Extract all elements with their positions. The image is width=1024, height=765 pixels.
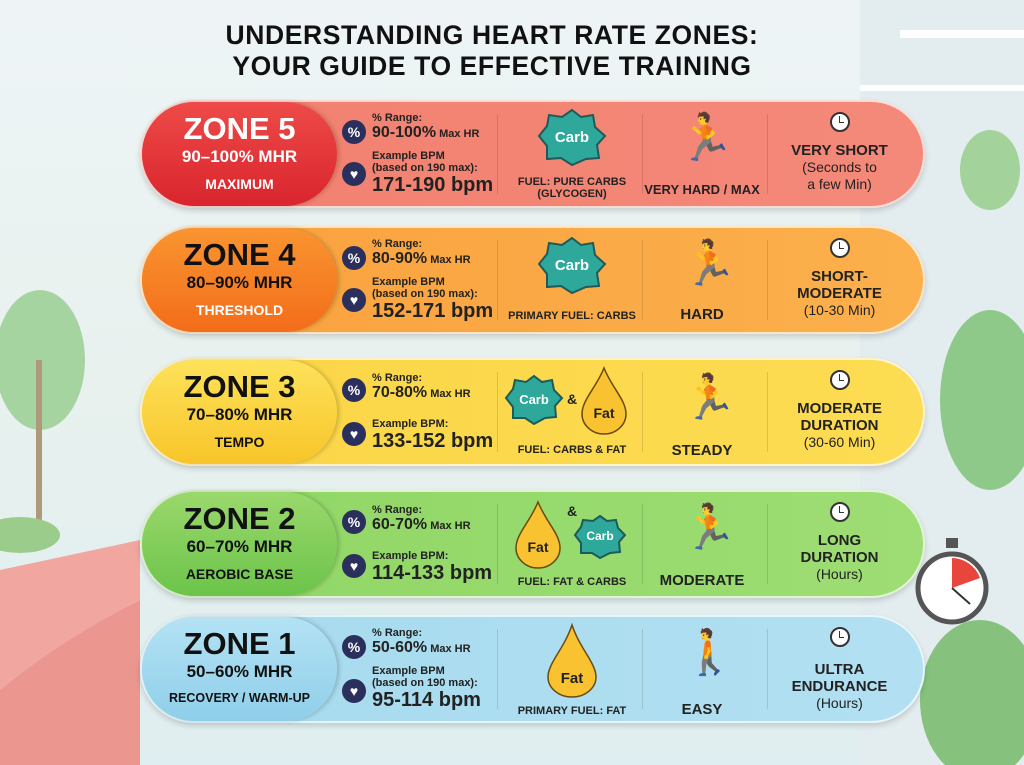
- panel: zone 4: MODERATE: [797, 285, 882, 302]
- panel: zone 1: Fat: [561, 670, 583, 687]
- panel: zone 3: %: [348, 382, 360, 398]
- panel: zone 1: ULTRA: [815, 661, 864, 678]
- panel: zone 1: %: [348, 639, 360, 655]
- zone 3 label pill: 70–80% MHR: [187, 405, 292, 424]
- panel: zone 5: (based on 190 max):: [372, 162, 478, 174]
- zone 2 stats: [342, 504, 492, 584]
- panel: zone 2: FUEL: FAT & CARBS: [518, 576, 626, 588]
- panel: zone 2: [140, 490, 925, 598]
- panel: zone 2: &: [567, 503, 577, 519]
- panel: zone 1: Example BPM: [372, 665, 445, 677]
- effort: steady: [672, 372, 737, 459]
- panel: zone 4: HARD: [680, 306, 724, 323]
- panel: zone 5: Carb: [555, 129, 589, 146]
- panel: zone 1: (Hours): [816, 695, 863, 711]
- panel: zone 2: Example BPM:: [372, 550, 448, 562]
- zone 4 label pill: [142, 228, 337, 332]
- panel: zone 1: PRIMARY FUEL: FAT: [518, 705, 626, 717]
- panel: zone 5: % Range:: [372, 112, 422, 124]
- panel: zone 4: 🏃: [682, 239, 737, 288]
- panel: zone 3: 🏃: [682, 373, 737, 422]
- panel: zone 5: (Seconds to: [802, 159, 877, 175]
- icon: stopwatch: [916, 538, 988, 624]
- panel: zone 2: 🏃: [682, 503, 737, 552]
- effort: hard: [680, 238, 737, 323]
- zone 1 label pill: 50–60% MHR: [187, 662, 292, 681]
- zone 5 label pill: [142, 102, 337, 206]
- panel: zone 1: [140, 615, 925, 723]
- title: UNDERSTANDING HEART RATE ZONES:: [226, 20, 758, 50]
- panel: zone 5: %: [348, 124, 360, 140]
- zone 5 label pill: ZONE 5: [184, 111, 295, 146]
- panel: zone 1: EASY: [682, 701, 722, 718]
- effort: moderate: [660, 502, 744, 589]
- zone 3 label pill: [142, 360, 337, 464]
- duration: [797, 238, 882, 318]
- zone 5 label pill: 90–100% MHR: [182, 147, 297, 166]
- title: [226, 20, 758, 81]
- panel: zone 3: DURATION: [800, 417, 879, 434]
- panel: zone 5: VERY SHORT: [791, 142, 888, 159]
- panel: zone 3: % Range:: [372, 372, 422, 384]
- zone 2 label pill: ZONE 2: [184, 501, 295, 536]
- panel: zone 3: Example BPM:: [372, 418, 448, 430]
- panel: zone 4: % Range:: [372, 238, 422, 250]
- zone 4 stats: [342, 238, 493, 322]
- zone 4 label pill: 80–90% MHR: [187, 273, 292, 292]
- panel: zone 3: Carb: [519, 392, 549, 407]
- panel: zone 4: (based on 190 max):: [372, 288, 478, 300]
- panel: zone 2: 114-133 bpm: [372, 562, 492, 584]
- title: YOUR GUIDE TO EFFECTIVE TRAINING: [232, 51, 752, 81]
- panel: zone 3: MODERATE: [797, 400, 882, 417]
- panel: zone 2: (Hours): [816, 566, 863, 582]
- duration: [792, 627, 887, 711]
- zone 2 label pill: 60–70% MHR: [187, 537, 292, 556]
- zone 4 label pill: THRESHOLD: [196, 302, 283, 318]
- zone 1 label pill: RECOVERY / WARM-UP: [169, 691, 310, 705]
- panel: zone 5: (GLYCOGEN): [537, 188, 607, 200]
- panel: zone 3: &: [567, 391, 577, 407]
- zone 2 label pill: [142, 492, 337, 596]
- panel: zone 3: 133-152 bpm: [372, 430, 493, 452]
- panel: zone 2: % Range:: [372, 504, 422, 516]
- effort: very hard: [644, 111, 760, 197]
- fuel: carb: [508, 236, 636, 322]
- fuel: carb and fat: [504, 366, 627, 456]
- panel: zone 5: Example BPM: [372, 150, 445, 162]
- panel: zone 5: 171-190 bpm: [372, 174, 493, 196]
- panel: zone 2: DURATION: [800, 549, 879, 566]
- panel: zone 2: ♥: [350, 558, 358, 574]
- zone 4 label pill: ZONE 4: [184, 237, 295, 272]
- panel: zone 4: Carb: [555, 257, 589, 274]
- panel: zone 4: (10-30 Min): [804, 302, 875, 318]
- panel: zone 4: Example BPM: [372, 276, 445, 288]
- zone 1 label pill: [142, 617, 337, 721]
- panel: zone 2: %: [348, 514, 360, 530]
- panel: zone 2: 60-70% Max HR: [372, 516, 471, 533]
- zone 1 label pill: ZONE 1: [184, 626, 295, 661]
- zone 3 stats: [342, 372, 493, 452]
- panel: zone 1: (based on 190 max):: [372, 677, 478, 689]
- panel: zone 5: VERY HARD / MAX: [644, 182, 760, 197]
- panel: zone 1: ENDURANCE: [792, 678, 887, 695]
- duration: [797, 370, 882, 450]
- panel: zone 1: 95-114 bpm: [372, 689, 481, 711]
- fuel: fat: [518, 623, 626, 717]
- panel: zone 4: %: [348, 250, 360, 266]
- panel: zone 5: [140, 100, 925, 208]
- zone 3 label pill: TEMPO: [215, 434, 264, 450]
- zone 2 label pill: AEROBIC BASE: [186, 566, 293, 582]
- zone 5 label pill: MAXIMUM: [205, 176, 274, 192]
- panel: zone 1: 50-60% Max HR: [372, 639, 471, 656]
- panel: zone 1: 🚶: [682, 628, 737, 677]
- panel: zone 4: ♥: [350, 292, 358, 308]
- panel: zone 5: FUEL: PURE CARBS: [518, 176, 626, 188]
- fuel: carb: [518, 108, 626, 200]
- panel: zone 5: ♥: [350, 166, 358, 182]
- duration: [800, 502, 879, 582]
- effort: easy: [682, 628, 737, 718]
- panel: zone 3: STEADY: [672, 442, 732, 459]
- panel: zone 2: LONG: [818, 532, 861, 549]
- panel: zone 2: Fat: [528, 539, 549, 555]
- panel: zone 1: ♥: [350, 683, 358, 699]
- panel: zone 3: (30-60 Min): [804, 434, 875, 450]
- panel: zone 3: ♥: [350, 426, 358, 442]
- panel: zone 5: 90-100% Max HR: [372, 124, 479, 141]
- panel: zone 1: % Range:: [372, 627, 422, 639]
- panel: zone 3: 70-80% Max HR: [372, 384, 471, 401]
- panel: zone 3: Fat: [594, 405, 615, 421]
- duration: [791, 112, 888, 192]
- panel: zone 2: Carb: [586, 529, 614, 543]
- panel: zone 4: 152-171 bpm: [372, 300, 493, 322]
- panel: zone 5: a few Min): [807, 176, 872, 192]
- panel: zone 3: [140, 358, 925, 466]
- zone 5 stats: [342, 112, 493, 196]
- fuel: fat and carb: [515, 500, 626, 588]
- panel: zone 4: 80-90% Max HR: [372, 250, 471, 267]
- panel: zone 3: FUEL: CARBS & FAT: [518, 444, 626, 456]
- panel: zone 4: [140, 226, 925, 334]
- panel: zone 4: SHORT-: [811, 268, 868, 285]
- panel: zone 4: PRIMARY FUEL: CARBS: [508, 310, 636, 322]
- zone 1 stats: [342, 627, 481, 711]
- zone 3 label pill: ZONE 3: [184, 369, 295, 404]
- panel: zone 2: MODERATE: [660, 572, 744, 589]
- panel: zone 5: 🏃: [677, 111, 734, 163]
